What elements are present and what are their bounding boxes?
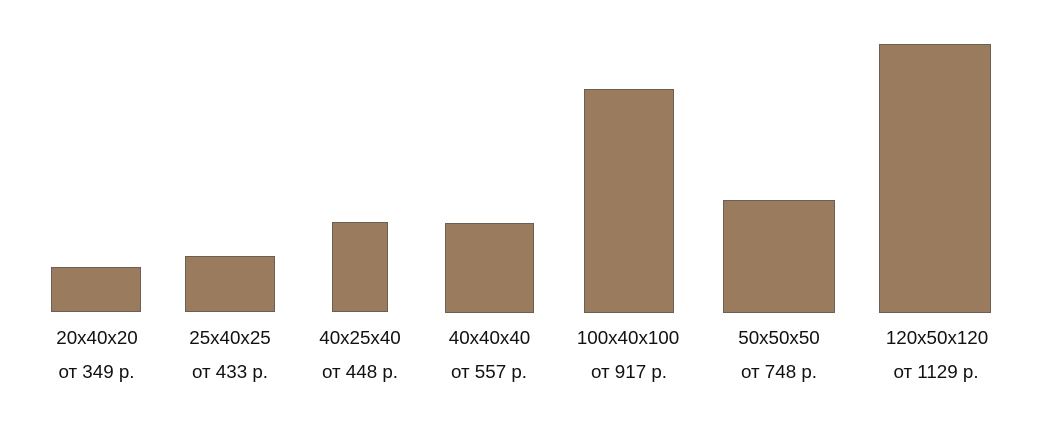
box: 25x40x25 <box>185 256 275 312</box>
size label: 120x50x120: 120x50x120 <box>886 327 988 348</box>
size label: 50x50x50: 50x50x50 <box>738 327 820 348</box>
box: 40x25x40 <box>332 222 388 312</box>
price label: 433: от 433 р. <box>192 361 268 382</box>
box: 120x50x120 <box>879 44 991 313</box>
size label: 25x40x25: 25x40x25 <box>189 327 271 348</box>
price label: 448: от 448 р. <box>322 361 398 382</box>
price label: 748: от 748 р. <box>741 361 817 382</box>
size label: 40x25x40: 40x25x40 <box>319 327 401 348</box>
box: 20x40x20 <box>51 267 141 312</box>
price label: 557: от 557 р. <box>451 361 527 382</box>
size label: 40x40x40: 40x40x40 <box>449 327 530 348</box>
price label: 349: от 349 р. <box>58 361 135 382</box>
size label: 100x40x100: 100x40x100 <box>577 327 679 348</box>
box: 50x50x50 <box>723 200 835 313</box>
size label: 20x40x20: 20x40x20 <box>56 327 138 348</box>
price label: 1129: от 1129 р. <box>893 361 979 382</box>
price label: 917: от 917 р. <box>591 361 667 382</box>
box: 40x40x40 <box>445 223 534 313</box>
box: 100x40x100 <box>584 89 674 313</box>
